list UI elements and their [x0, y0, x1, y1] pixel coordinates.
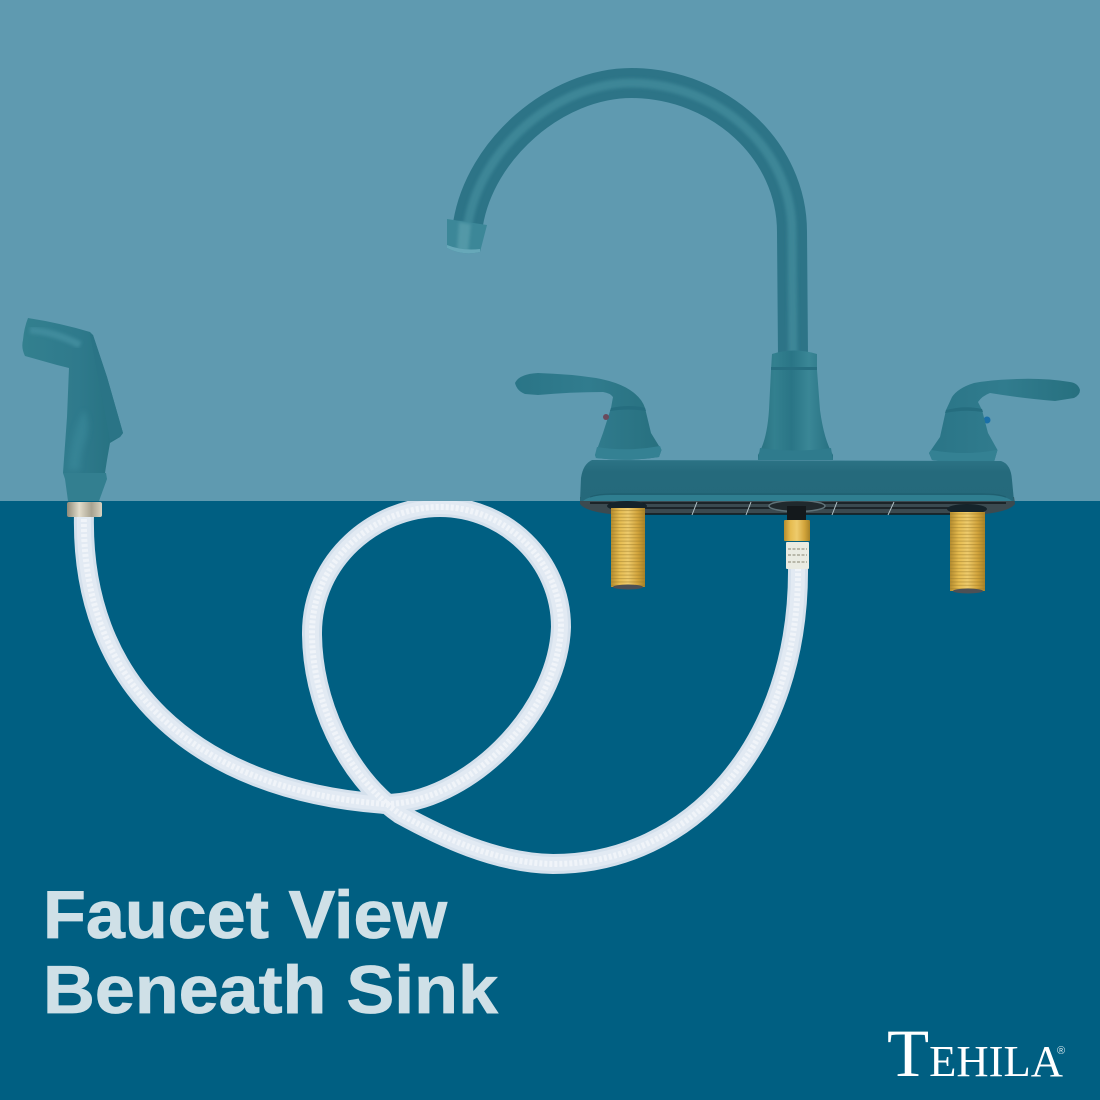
right threaded brass shank — [947, 504, 987, 594]
faucet deck plate — [580, 460, 1014, 501]
central hose connector — [784, 506, 810, 569]
background: lower panel — [0, 501, 1100, 1100]
background: upper panel — [0, 0, 1100, 501]
side sprayer — [22, 318, 123, 517]
right handle with blue marker — [929, 379, 1080, 463]
sprayer collar — [63, 473, 107, 501]
spout nozzle — [447, 219, 487, 253]
logo: Tehila: TEHILA — [887, 1015, 1063, 1091]
registered mark: ® — [1057, 1045, 1065, 1057]
title: Faucet View — [43, 877, 448, 953]
central faucet column — [758, 350, 833, 460]
faucet spout — [447, 83, 793, 356]
title: Beneath Sink — [43, 952, 498, 1028]
faucet deck plate underside — [580, 497, 1015, 515]
sprayer silver ferrule — [67, 502, 102, 517]
left threaded brass shank — [607, 501, 647, 590]
braided hose — [84, 507, 798, 864]
left handle with red marker — [515, 373, 662, 460]
title — [43, 877, 498, 1028]
